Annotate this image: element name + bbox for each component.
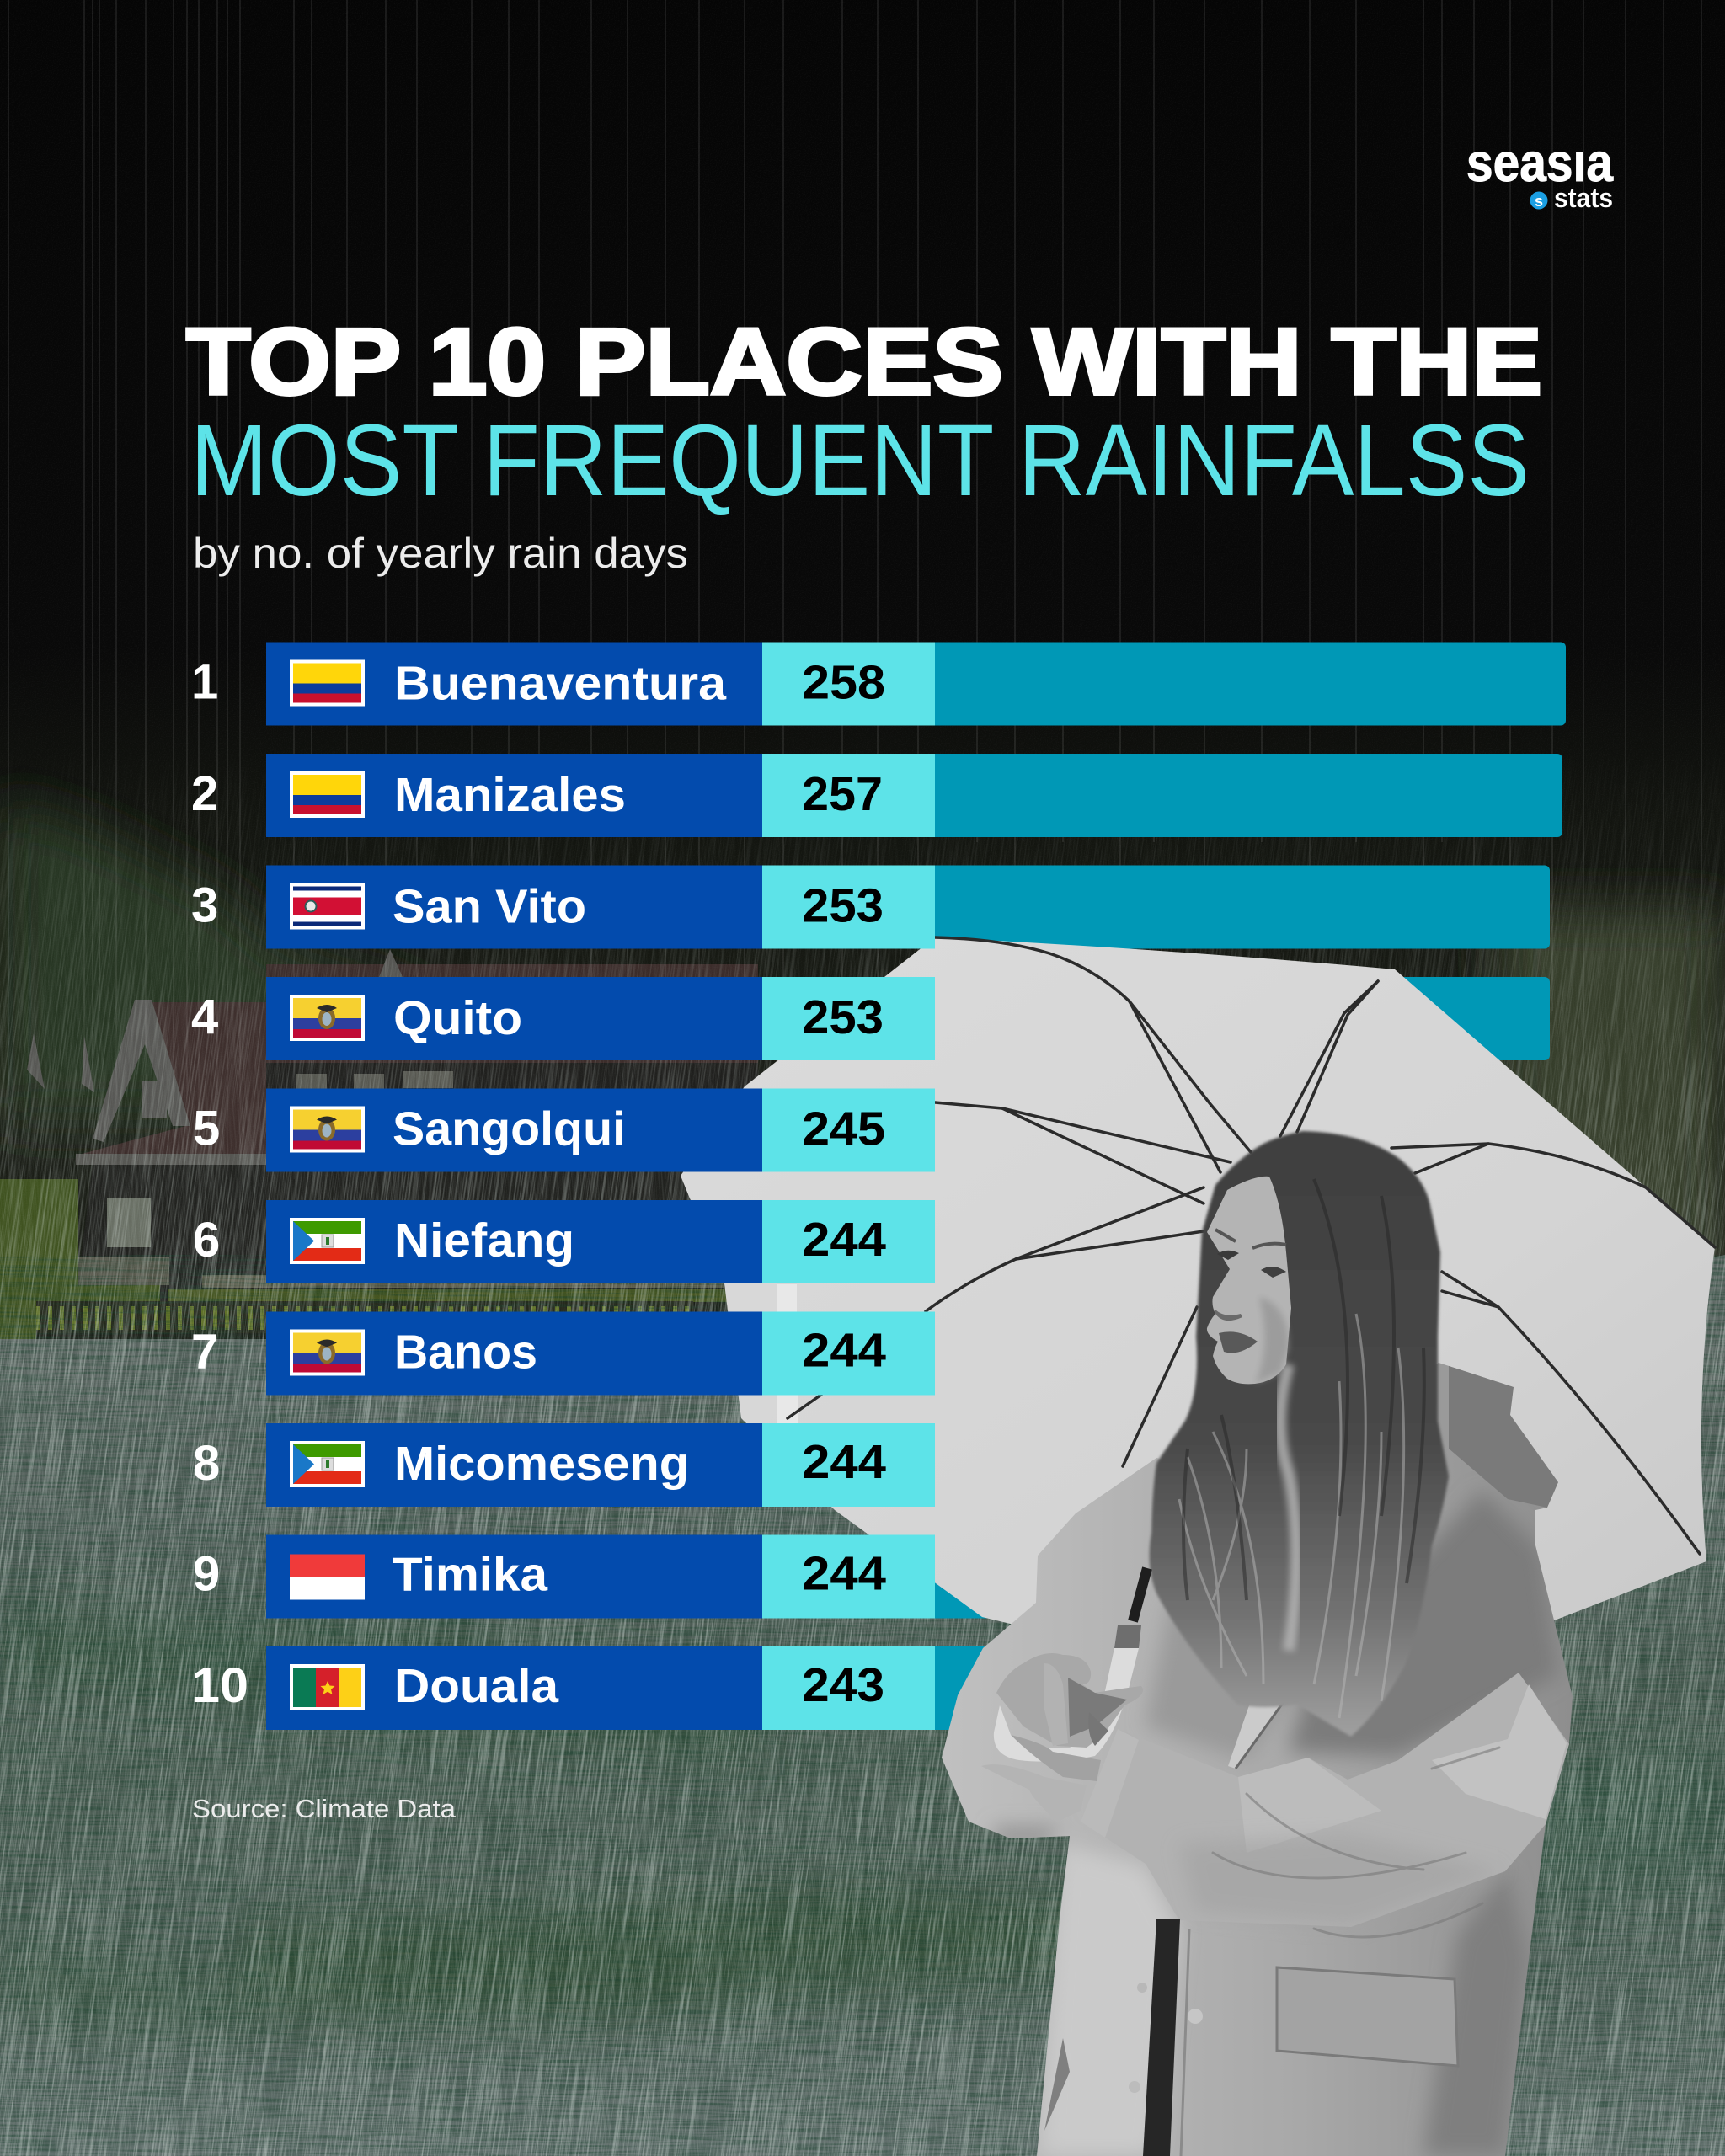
lower hand [1011,1735,1101,1781]
row 10: Douala: 10 [191,1658,248,1713]
row 10: Douala: 243 [802,1658,884,1712]
bar values: teal bars [884,642,1566,1730]
row 2: Manizales [191,754,935,837]
flag: Colombia [290,660,365,706]
row 10: Douala [191,1646,935,1730]
row 8: Micomeseng: Micomeseng [394,1437,689,1491]
row 1: Buenaventura: 1 [191,655,218,709]
row 7: Banos [191,1312,935,1395]
row 7: Banos: 244 [802,1324,886,1378]
hood [1449,1358,1558,1508]
logo: seasia stats [1466,132,1613,213]
flag: Ecuador [290,1329,365,1376]
logo icon: s [1535,193,1543,210]
collar lining [1228,1705,1279,1769]
coat shading [994,1491,1558,2156]
row 9: Timika: 9 [193,1546,220,1602]
row 6: Niefang: 244 [802,1213,886,1267]
row 2: Manizales: Manizales [394,768,626,822]
row 10: Douala: Douala [394,1659,559,1713]
row 1: Buenaventura: Buenaventura [394,657,727,711]
row 5: Sangolqui: 245 [802,1102,885,1155]
row 7: Banos: 7 [191,1324,218,1380]
row 8: Micomeseng [193,1423,935,1507]
row 4: Quito: Quito [393,991,522,1045]
reflection bands [0,1609,1725,2038]
source note: Source: Climate Data [192,1794,457,1823]
lake water [0,1255,1725,2156]
row 9: Timika [193,1534,935,1619]
hair [1150,1131,1449,1737]
flag: Ecuador [290,1107,365,1152]
pocket [1277,1967,1458,2066]
row 6: Niefang: Niefang [394,1214,574,1267]
row 2: Manizales: 257 [802,767,883,821]
row 1: Buenaventura [191,642,935,726]
flag: Indonesia [290,1555,365,1600]
row 5: Sangolqui [193,1088,935,1172]
row 6: Niefang: 6 [193,1213,220,1267]
flag: Costa Rica [290,883,365,930]
handle and hands [981,1568,1147,1822]
row 7: Banos: Banos [394,1326,537,1380]
row 4: Quito: 4 [191,990,218,1044]
row 5: Sangolqui: Sangolqui [393,1102,626,1155]
logo: seasia stats: seasıa [1466,132,1613,193]
title: line one: TOP 10 PLACES WITH THE [186,309,1542,414]
water ripples [0,1255,1725,2156]
row 9: Timika: 244 [802,1546,886,1600]
hillside: right [1499,910,1725,1289]
flag: Ecuador [290,995,365,1041]
row 3: San Vito: 3 [191,878,218,933]
sleeve [1140,1673,1569,1927]
row 1: Buenaventura: 258 [802,655,885,709]
row 5: Sangolqui: 5 [193,1102,220,1155]
flag: Equatorial Guinea [290,1218,365,1264]
face [1207,1177,1291,1384]
rain streaks [0,799,1725,2156]
logo: seasia stats: stats [1554,183,1613,213]
flag: Colombia [290,771,365,818]
row 9: Timika: Timika [393,1548,548,1602]
flag: Cameroon [290,1664,365,1710]
logo icon [1530,192,1548,210]
illustration: woman with umbrella [681,937,1715,2156]
row 3: San Vito: San Vito [393,879,586,933]
flag: Equatorial Guinea [290,1441,365,1487]
light strands [1179,1314,1404,1718]
umbrella [681,937,1715,1684]
row 2: Manizales: 2 [191,766,218,821]
row 4: Quito [191,977,935,1060]
shirt gap [1143,1919,1180,2156]
upper hand [996,1653,1143,1748]
title: line two: MOST FREQUENT RAINFALSS [190,403,1530,517]
row 8: Micomeseng: 8 [193,1436,220,1491]
hillside: left [0,800,438,1120]
vertical rain lines [8,0,1702,1216]
row 8: Micomeseng: 244 [802,1435,886,1489]
house [0,949,758,1339]
row 4: Quito: 253 [802,990,884,1044]
row 6: Niefang [193,1200,935,1283]
row 3: San Vito [191,866,935,948]
subtitle: by no. of yearly rain days [193,530,688,577]
coat [942,1358,1573,2156]
row 3: San Vito: 253 [802,879,884,933]
